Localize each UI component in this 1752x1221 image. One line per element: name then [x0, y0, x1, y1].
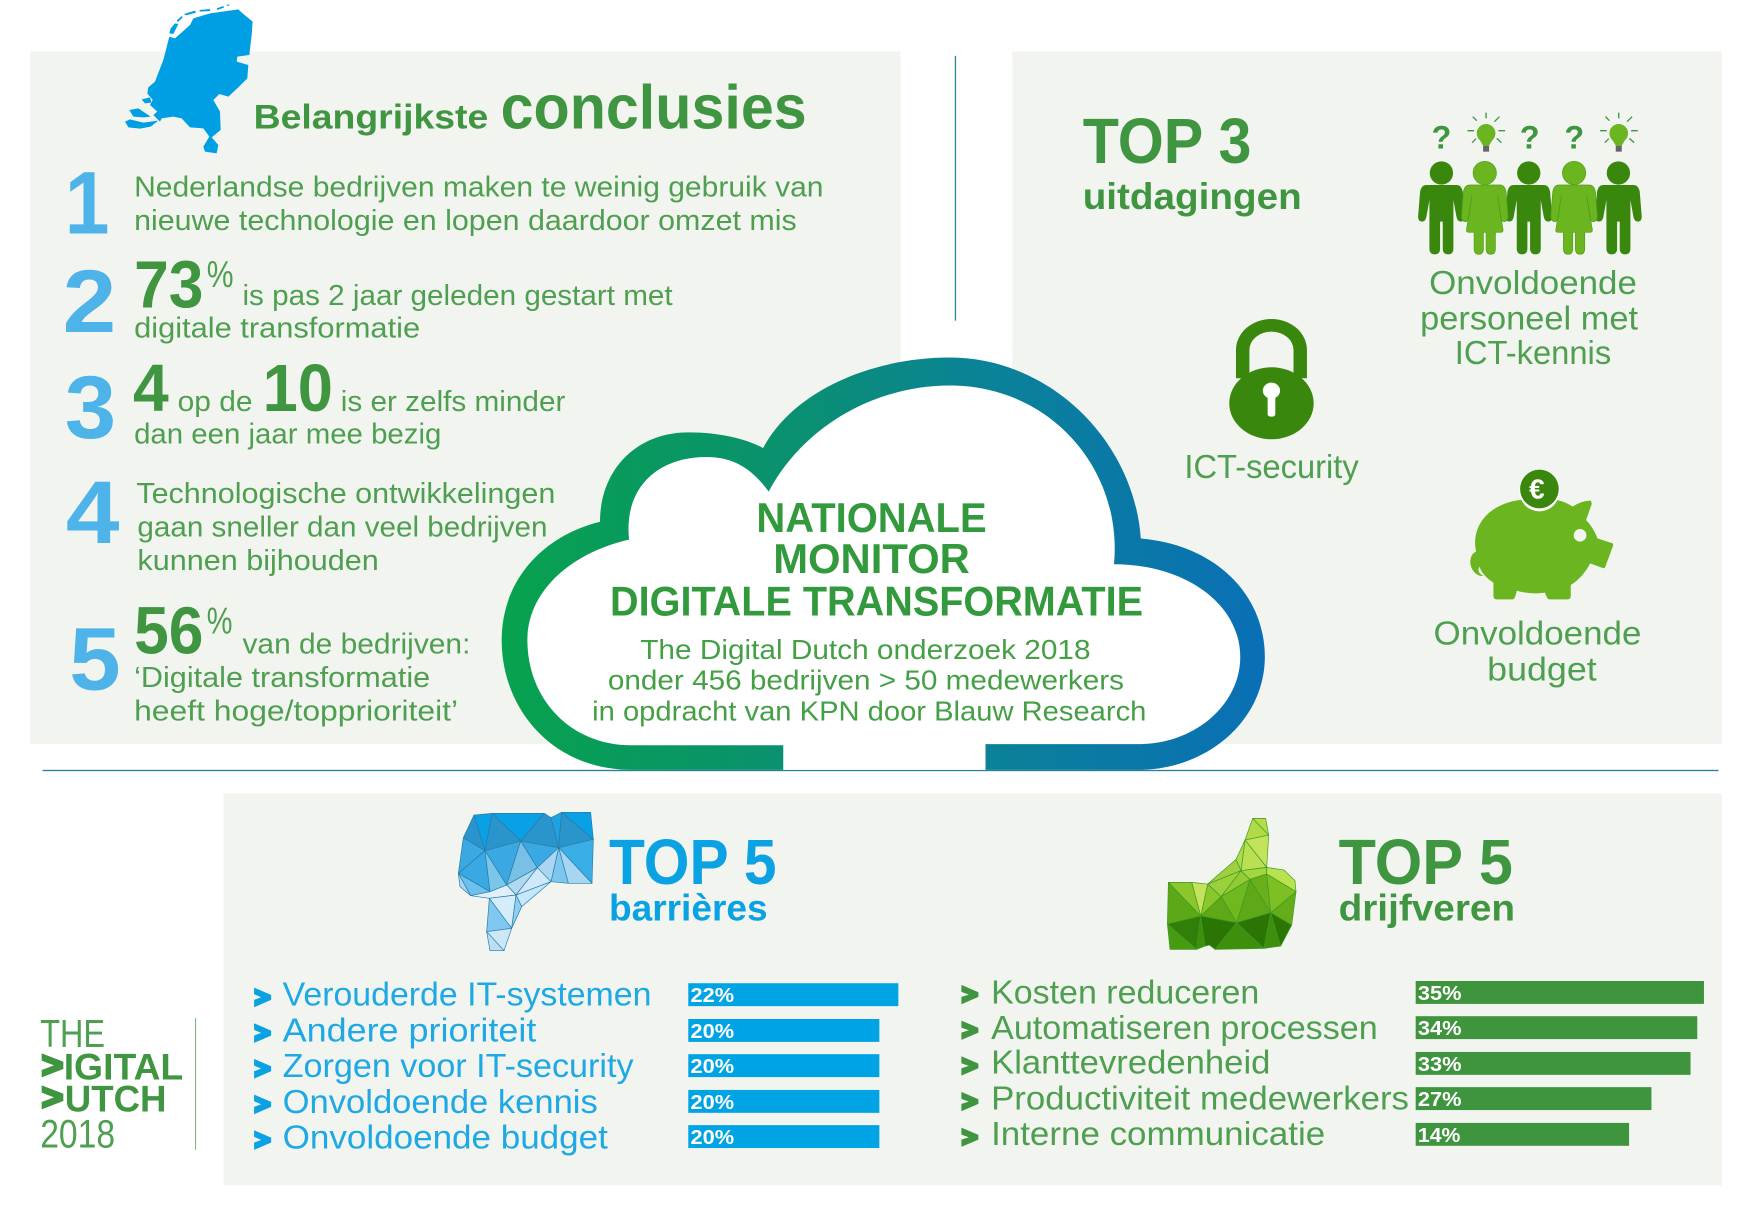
label: ict-security: ICT-security	[1184, 449, 1359, 486]
heading: top 5 barrières: barrières	[609, 888, 768, 929]
icon: map of the Netherlands	[125, 4, 253, 153]
cloud title: NATIONALE	[756, 495, 987, 541]
bar chart: barrières: 20%	[691, 1127, 734, 1149]
conclusion 5: ‘Digitale transformatie	[134, 662, 430, 694]
conclusion 5	[69, 594, 470, 728]
bar chart: drijfveren: 34%	[1418, 1018, 1462, 1040]
question marks above people	[1431, 120, 1584, 156]
heading: belangrijkste conclusies: conclusies	[501, 72, 807, 142]
icon: padlock	[1229, 319, 1314, 439]
conclusion 3: dan een jaar mee bezig	[134, 419, 441, 451]
logo: the digital dutch 2018	[40, 1013, 183, 1156]
conclusion 2: digitale transformatie	[134, 312, 420, 344]
conclusion 1	[65, 153, 823, 253]
heading: top 3 uitdagingen: uitdagingen	[1083, 176, 1302, 217]
cloud body text: The Digital Dutch onderzoek 2018	[640, 634, 1091, 665]
cloud: gradient outline	[502, 358, 1265, 770]
list: barrières: Zorgen voor IT-security	[283, 1048, 634, 1085]
bar chart: barrières	[688, 983, 898, 1149]
question marks above people: ?	[1520, 120, 1540, 156]
conclusion 3: 3	[65, 357, 116, 457]
heading: top 5 drijfveren: TOP 5	[1339, 827, 1513, 898]
bar chart: drijfveren	[1416, 981, 1704, 1147]
icon: five people with bulbs	[1418, 113, 1642, 254]
list: barrières: Andere prioriteit	[283, 1012, 537, 1049]
conclusion 3: 10	[263, 351, 333, 426]
conclusion 2: 2	[63, 251, 116, 351]
bar chart: barrières: 20%	[691, 1092, 734, 1114]
list: barrières	[254, 977, 651, 1157]
conclusion 4: Technologische ontwikkelingen	[136, 478, 555, 510]
conclusion 2	[63, 247, 673, 351]
conclusion 4: 4	[66, 462, 120, 562]
conclusion 2: 73	[134, 247, 203, 322]
cloud body text	[592, 634, 1146, 727]
bar chart: barrières: 22%	[691, 985, 734, 1007]
list: drijfveren: Interne communicatie	[991, 1116, 1325, 1153]
label: onvoldoende budget: Onvoldoende	[1434, 616, 1641, 653]
question marks above people: ?	[1564, 120, 1584, 156]
bar chart: drijfveren: 35%	[1418, 983, 1462, 1005]
icon: piggy bank	[1470, 470, 1613, 599]
list: drijfveren: Klanttevredenheid	[991, 1045, 1270, 1082]
conclusion 2: is pas 2 jaar geleden gestart met	[242, 280, 673, 312]
cloud title: MONITOR	[773, 536, 970, 582]
heading: top 3 uitdagingen	[1083, 106, 1302, 217]
list: drijfveren	[961, 974, 1409, 1153]
heading: top 5 barrières: TOP 5	[609, 827, 777, 898]
label: onvoldoende budget: budget	[1487, 651, 1597, 688]
icon: low-poly thumbs down	[458, 812, 593, 951]
bar chart: drijfveren: 33%	[1418, 1054, 1462, 1076]
cloud title: DIGITALE TRANSFORMATIE	[610, 579, 1143, 625]
conclusion 3	[65, 351, 566, 457]
conclusion 4: gaan sneller dan veel bedrijven	[137, 511, 548, 543]
euro sign on coin: €	[1529, 473, 1545, 504]
conclusion 2: %	[207, 254, 234, 295]
conclusion 5: heeft hoge/topprioriteit’	[134, 696, 458, 728]
cloud title	[610, 495, 1143, 625]
cloud body text: in opdracht van KPN door Blauw Research	[592, 696, 1146, 727]
question marks above people: ?	[1431, 120, 1451, 156]
bar chart: barrières: 20%	[691, 1021, 734, 1043]
logo: the digital dutch 2018: UTCH	[65, 1079, 166, 1120]
conclusion 3: op de	[178, 386, 253, 418]
label: onvoldoende budget	[1434, 616, 1641, 688]
conclusion 4: kunnen bijhouden	[137, 545, 379, 577]
cloud body text: onder 456 bedrijven > 50 medewerkers	[608, 664, 1124, 695]
conclusion 5: 56	[134, 594, 203, 669]
conclusion 5: 5	[69, 608, 121, 708]
label: onvoldoende personeel: Onvoldoende	[1429, 265, 1637, 302]
list: barrières: Onvoldoende kennis	[283, 1084, 598, 1121]
conclusion 1: 1	[65, 153, 110, 253]
label: onvoldoende personeel	[1420, 265, 1639, 372]
conclusion 3: 4	[133, 351, 169, 426]
bar chart: drijfveren: 14%	[1418, 1125, 1460, 1147]
list: barrières: Onvoldoende budget	[283, 1120, 609, 1157]
list: barrières: Verouderde IT-systemen	[283, 977, 651, 1014]
heading: belangrijkste conclusies: Belangrijkste	[254, 98, 488, 136]
panel: top 5 background	[223, 793, 1722, 1185]
panel: belangrijkste conclusies background	[30, 51, 901, 744]
conclusion 3: is er zelfs minder	[341, 386, 566, 418]
bar chart: barrières: 20%	[691, 1056, 734, 1078]
heading: top 5 barrières	[609, 827, 777, 929]
cloud: white interior	[527, 385, 1240, 770]
panel: top 3 uitdagingen background	[1012, 51, 1722, 744]
heading: belangrijkste conclusies	[254, 72, 807, 142]
heading: top 5 drijfveren	[1339, 827, 1515, 929]
logo: the digital dutch 2018: IGITAL	[64, 1046, 183, 1087]
conclusion 1: Nederlandse bedrijven maken te weinig gebruik van	[134, 172, 823, 204]
list: drijfveren: Automatiseren processen	[991, 1010, 1378, 1047]
logo: the digital dutch 2018: 2018	[40, 1111, 115, 1156]
list: drijfveren: Kosten reduceren	[991, 974, 1259, 1011]
icon: low-poly thumbs up	[1167, 818, 1296, 949]
conclusion 5: van de bedrijven:	[242, 629, 470, 661]
heading: top 5 drijfveren: drijfveren	[1339, 888, 1515, 929]
label: onvoldoende personeel: personeel met	[1420, 301, 1639, 338]
list: drijfveren: Productiviteit medewerkers	[991, 1080, 1409, 1117]
conclusion 5: %	[207, 601, 232, 642]
bar chart: drijfveren: 27%	[1418, 1089, 1462, 1111]
logo: the digital dutch 2018: THE	[40, 1013, 105, 1056]
conclusion 4	[66, 462, 555, 577]
heading: top 3 uitdagingen: TOP 3	[1083, 106, 1251, 177]
label: onvoldoende personeel: ICT-kennis	[1455, 335, 1611, 372]
conclusion 1: nieuwe technologie en lopen daardoor omzet mis	[134, 205, 797, 237]
